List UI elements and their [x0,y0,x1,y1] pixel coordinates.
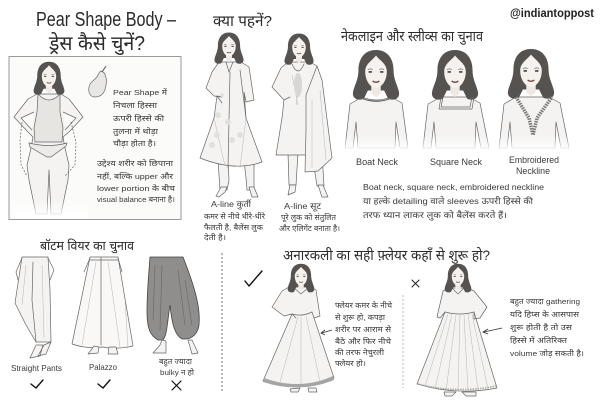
text: neckline advice: तरफ ध्यान लाकर लुक को बैलेंस करते हैं। [363,210,507,221]
text: gathering warning: volume जोड़ सकती है। [510,349,584,358]
text: neckline advice [363,182,544,221]
title: ड्रेस कैसे चुनें? [48,30,145,56]
heading: anarkali flare: अनारकली का सही फ़्लेयर कहाँ से शुरू हो? [283,246,490,265]
arrow: to hips [483,328,502,334]
label: A-line kurti: देती है। [204,233,226,242]
label: A-line kurti: फैलती है, बैलेंस लुक [204,223,263,233]
text: goal: visual balance बनाना है। [97,195,175,204]
figure: A-line suit with dupatta [272,34,332,197]
label: boat neck: Boat Neck [356,157,398,167]
figure: embroidered neckline [496,49,572,151]
label: A-line suit [279,201,340,233]
label: A-line suit: और एलिगेंट बनाता है। [279,224,340,233]
text: gathering warning: हिस्से में अतिरिक्त [510,336,568,345]
icon: cross [412,280,419,287]
text: correct flare note: फ्लेयर कमर के नीचे [335,301,392,310]
label: A-line suit: पूरे लुक को संतुलित [281,213,337,223]
figure: straight pants [15,257,54,358]
label: A-line kurti: A-line कुर्ती [211,199,252,210]
label: embroidered neckline: Embroidered [509,155,559,165]
title: Pear Shape Body – [36,9,177,31]
figure: over-gathered anarkali [417,264,497,396]
title [36,9,177,56]
label: palazzo: Palazzo [89,362,117,372]
text: correct flare note: शरीर पर आराम से [335,325,392,334]
text: goal: lower portion के बीच [97,184,175,193]
text: correct flare note: से शुरू हो, कपड़ा [335,313,386,323]
label: too bulky: बहुत ज्यादा [159,357,193,367]
text: pear shape definition: तुलना में थोड़ा [113,127,159,137]
text: pear shape definition [113,88,168,148]
text: gathering warning: यदि हिप्स के आसपास [510,310,580,319]
text: pear shape definition: Pear Shape में [113,88,168,97]
label: too bulky [159,357,195,377]
text: goal: नहीं, बल्कि upper और [97,172,174,181]
label: too bulky: bulky न हो [160,368,195,377]
text: neckline advice: Boat neck, square neck, embroidered neckline [363,182,544,192]
figure: pear shape body [12,62,88,218]
figure: A-line kurti [200,33,262,197]
icon: check [98,380,110,388]
icon: check [245,271,262,286]
icon: pear [89,66,106,97]
heading: bottom wear: बॉटम वियर का चुनाव [40,238,135,254]
figure: square neck [420,50,492,151]
icon: check [31,380,43,388]
text: pear shape definition: ऊपरी हिस्से की [113,114,165,123]
text: pear shape definition: चौड़ा होता है। [113,139,156,148]
text: correct flare note: फ्लेयर हो। [335,359,366,368]
icon: cross [172,381,181,390]
label: embroidered neckline: Neckline [516,166,550,176]
text: correct flare note: बैठे और फिर नीचे [335,337,391,346]
label: A-line suit: A-line सूट [284,201,322,212]
text: correct flare note [335,301,392,368]
text: goal: उद्देश्य शरीर को छिपाना [97,159,174,168]
text: gathering warning [510,297,584,358]
figure: palazzo [72,257,133,354]
figure: boat neck [342,50,412,151]
label: A-line kurti [204,199,266,242]
text: neckline advice: या हल्के detailing वाले sleeves ऊपरी हिस्से की [363,196,534,206]
text: pear shape definition: निचला हिस्सा [113,101,158,110]
arrow: to flare [321,330,332,335]
label: A-line kurti: कमर से नीचे धीरे-धीरे [204,212,266,221]
label: embroidered neckline [509,155,559,176]
text: goal [97,159,175,204]
heading: what to wear: क्या पहनें? [213,12,272,30]
text: gathering warning: बहुत ज्यादा gathering [510,297,580,307]
text: gathering warning: शुरू होती है तो उस [510,323,573,333]
panel: pear shape explanation [9,56,181,220]
figure: bulky harem pants [147,257,199,354]
label: square neck: Square Neck [430,157,482,167]
figure: correct anarkali [263,264,334,392]
heading: neckline and sleeves: नेकलाइन और स्लीव्स का चुनाव [341,27,483,46]
brand handle: @indiantoppost [510,8,594,20]
label: straight pants: Straight Pants [11,363,62,373]
text: correct flare note: की तरफ नेचुरली [335,348,385,358]
